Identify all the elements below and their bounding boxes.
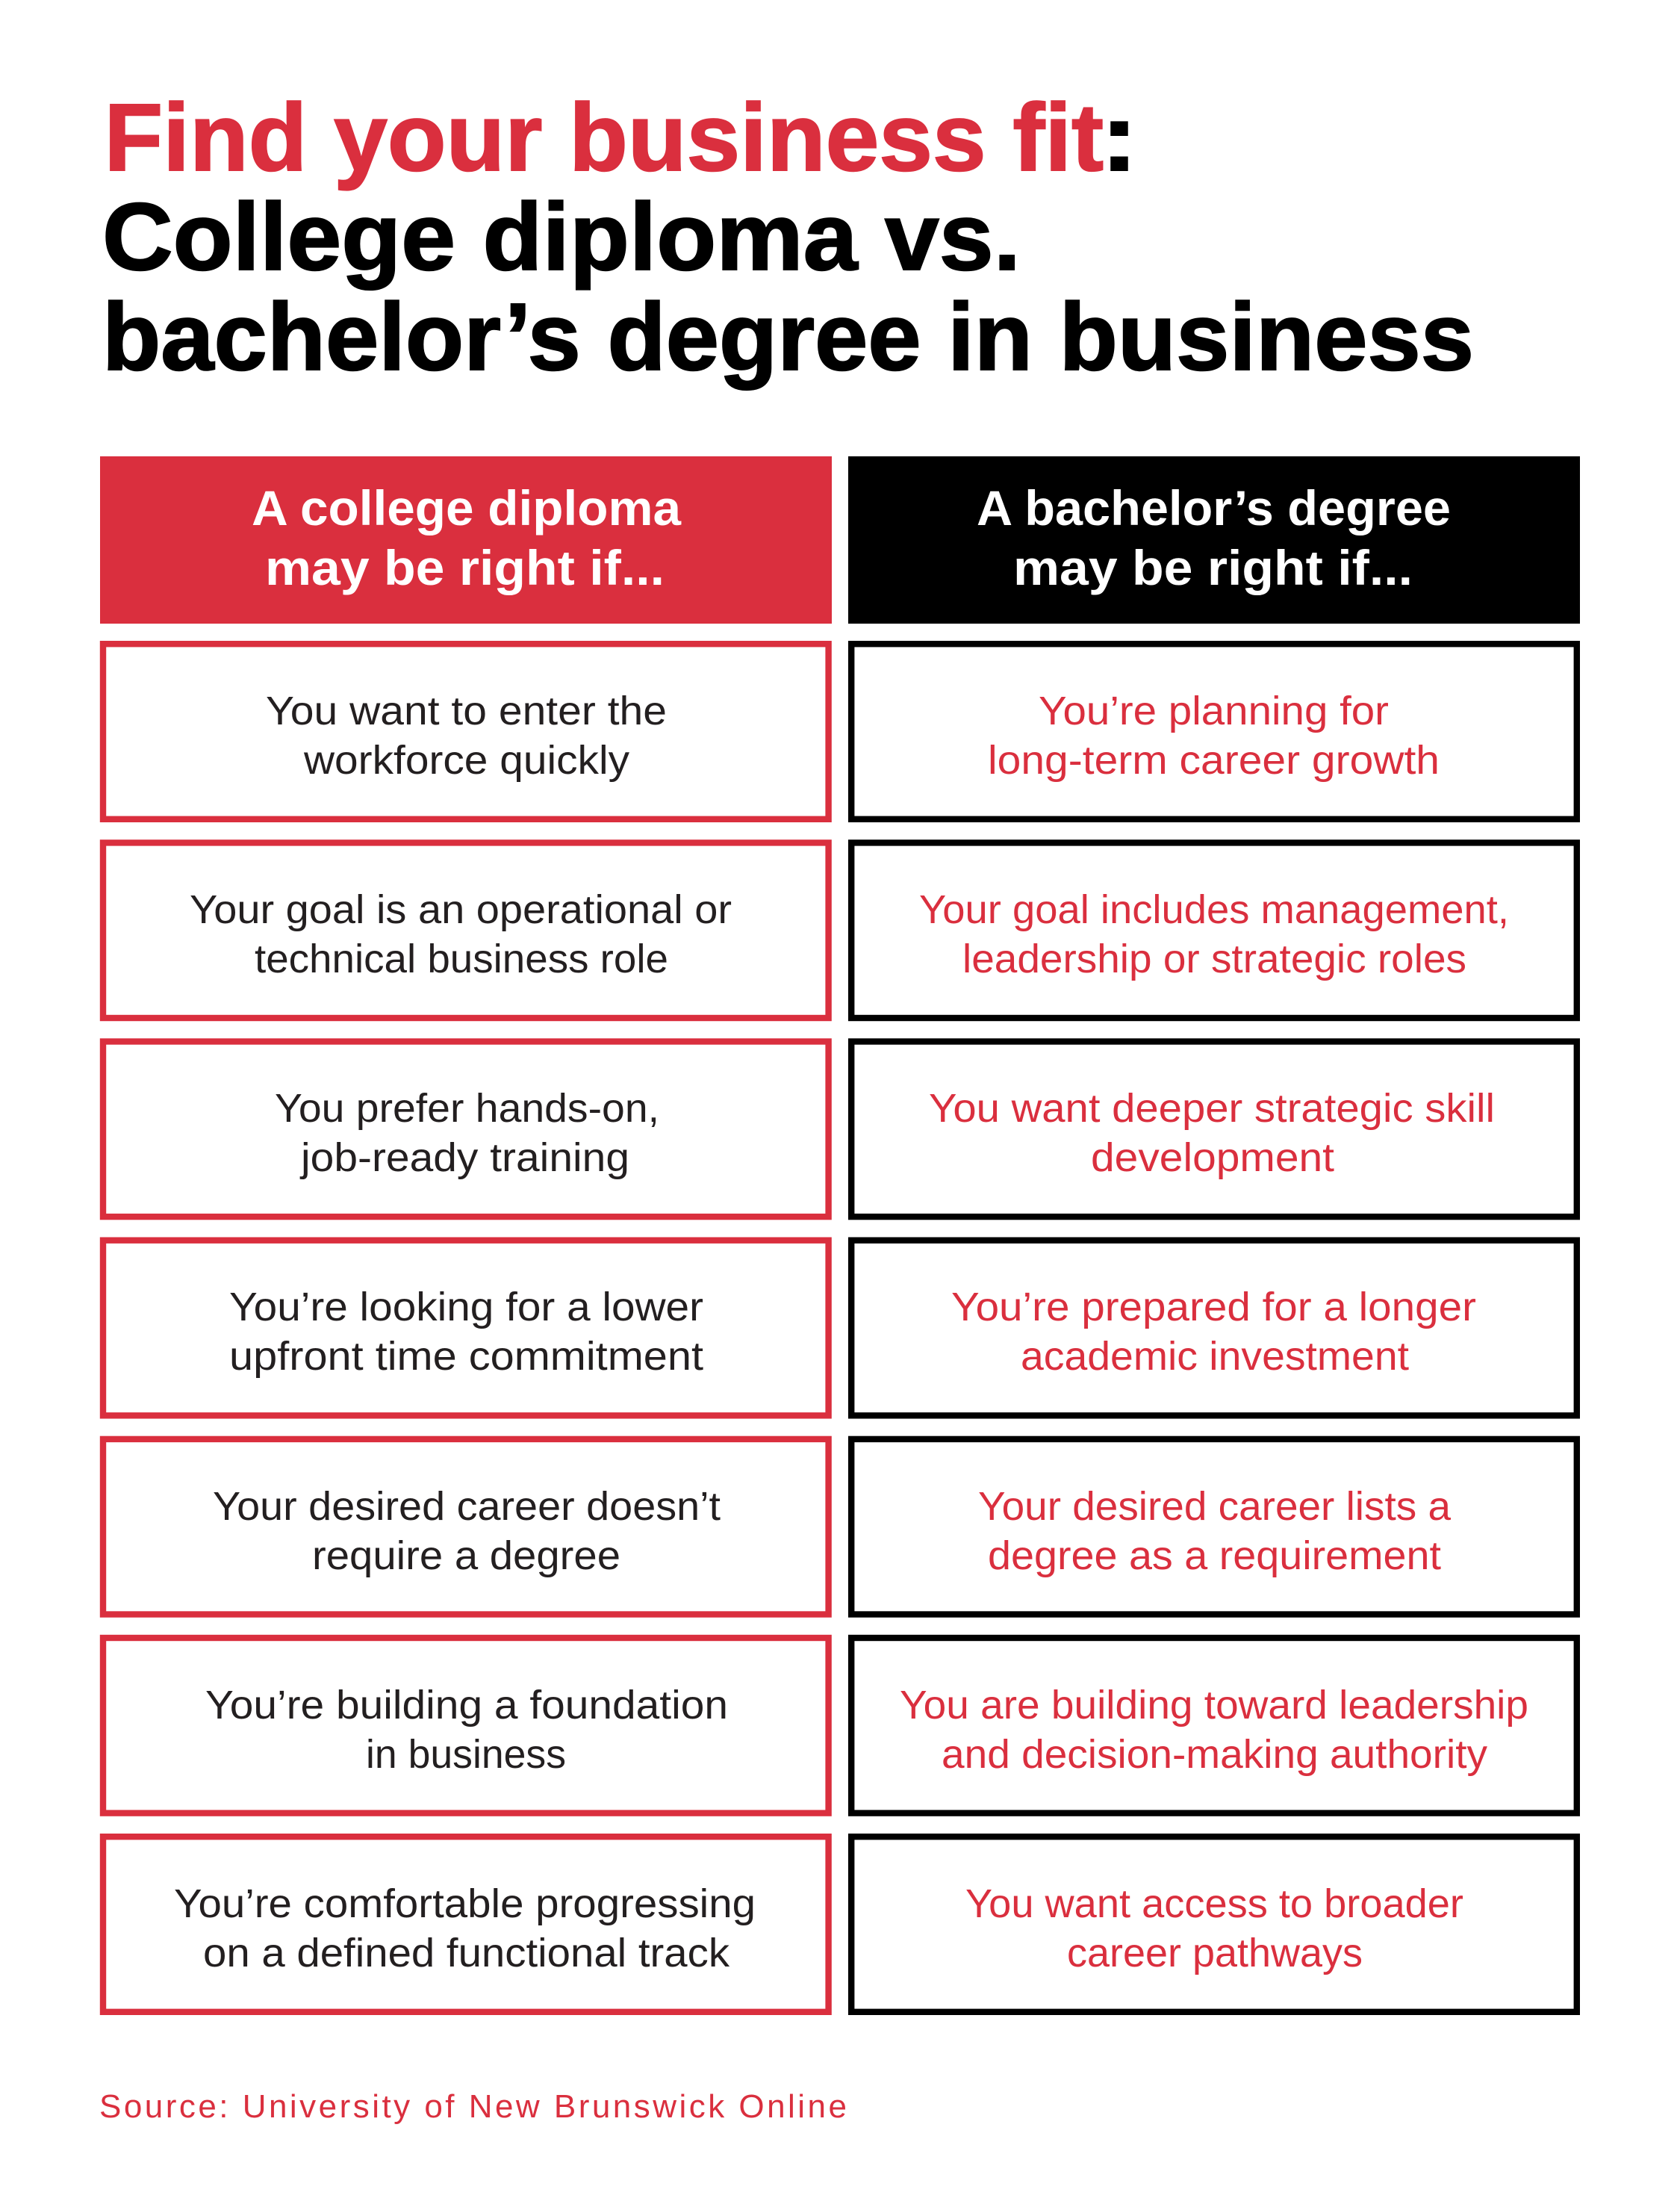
row 5 right: degree as a requirement [988, 1533, 1441, 1578]
column heading: college diploma: A college diploma [252, 480, 682, 536]
panel: bachelor's degree column [848, 456, 1580, 2012]
column heading: bachelor's degree: may be right if... [1013, 540, 1413, 595]
row 1 right: You’re planning for [1039, 689, 1389, 733]
row 3 right: development [1091, 1135, 1334, 1180]
title: : [1101, 84, 1138, 191]
row 4 left: You’re looking for a lower [229, 1285, 703, 1329]
row 4 right [851, 1241, 1577, 1415]
row 5 left [103, 1439, 829, 1615]
row 5 right [851, 1439, 1577, 1615]
row 3 right [851, 1041, 1577, 1217]
row 6 left [103, 1638, 829, 1813]
row 3 right: You want deeper strategic skill [929, 1086, 1495, 1131]
row 4 left: upfront time commitment [229, 1334, 703, 1379]
row 7 left: You’re comfortable progressing [174, 1881, 756, 1926]
column heading: bachelor's degree: A bachelor’s degree [977, 480, 1451, 536]
row 2 left [103, 842, 829, 1018]
panel: college diploma column [100, 456, 832, 2012]
row 6 left: You’re building a foundation [205, 1683, 728, 1728]
row 5 right: Your desired career lists a [978, 1484, 1452, 1529]
row 2 right: leadership or strategic roles [962, 937, 1466, 981]
column heading: bachelor's degree [848, 456, 1580, 624]
row 7 left [103, 1837, 829, 2012]
row 4 right: You’re prepared for a longer [951, 1285, 1476, 1329]
title [102, 84, 1474, 391]
row 3 left: job-ready training [299, 1135, 629, 1180]
row 7 right [851, 1837, 1577, 2012]
row 1 right [851, 644, 1577, 819]
source note: Source: University of New Brunswick Online [99, 2088, 847, 2125]
row 6 right: and decision-making authority [942, 1732, 1487, 1777]
row 7 left: on a defined functional track [203, 1931, 730, 1975]
row 6 right: You are building toward leadership [900, 1683, 1528, 1728]
title: College diploma vs. [102, 184, 1021, 291]
column heading: college diploma [100, 456, 832, 624]
row 1 left: workforce quickly [303, 738, 629, 783]
row 2 left: technical business role [255, 937, 668, 981]
row 1 left [103, 644, 829, 819]
row 2 left: Your goal is an operational or [190, 887, 732, 932]
row 3 left [103, 1041, 829, 1217]
row 6 left: in business [366, 1732, 566, 1777]
column heading: college diploma: may be right if... [265, 540, 665, 595]
row 7 right: You want access to broader [965, 1881, 1463, 1926]
row 6 right [851, 1638, 1577, 1813]
row 1 right: long-term career growth [988, 738, 1440, 783]
title: bachelor’s degree in business [102, 284, 1474, 391]
row 4 left [103, 1241, 829, 1415]
row 5 left: Your desired career doesn’t [213, 1484, 721, 1529]
title: Find your business fit [105, 84, 1104, 191]
row 7 right: career pathways [1067, 1931, 1363, 1975]
row 2 right: Your goal includes management, [919, 887, 1509, 932]
row 2 right [851, 842, 1577, 1018]
row 1 left: You want to enter the [266, 689, 667, 733]
row 3 left: You prefer hands-on, [275, 1086, 659, 1131]
row 4 right: academic investment [1021, 1334, 1409, 1379]
row 5 left: require a degree [312, 1533, 620, 1578]
